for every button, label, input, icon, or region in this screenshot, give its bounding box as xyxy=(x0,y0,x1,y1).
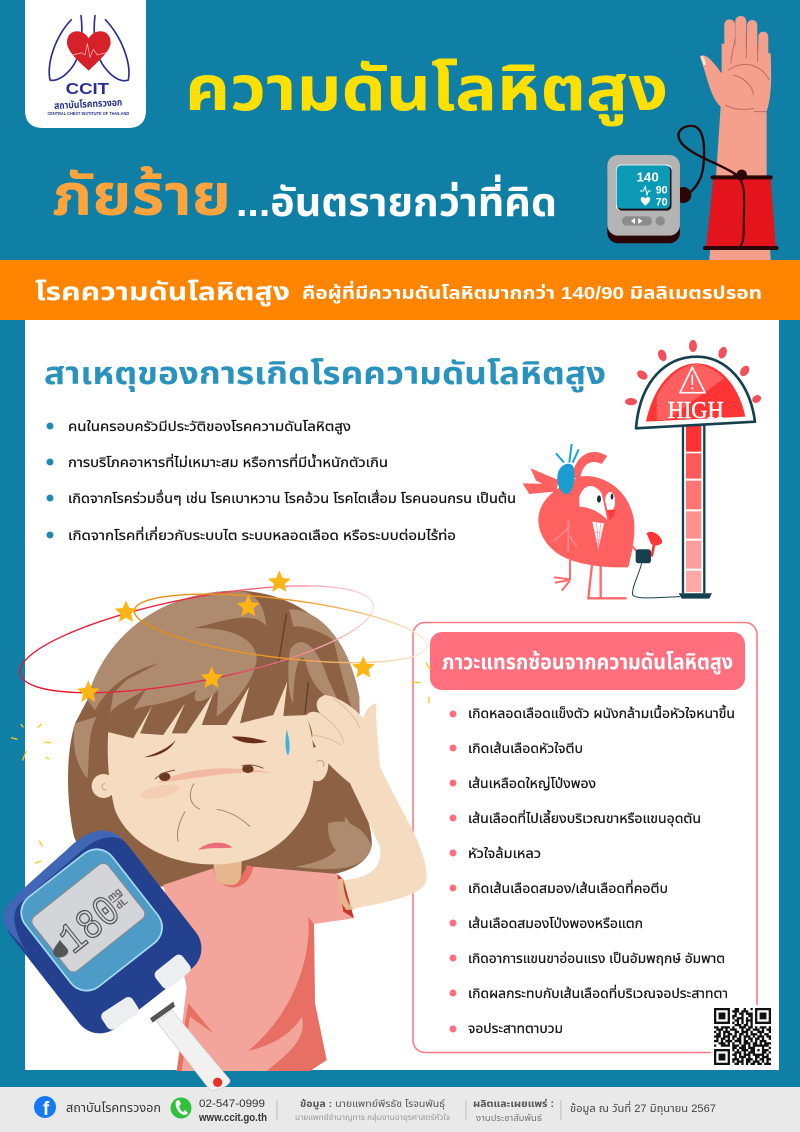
logo card xyxy=(25,0,146,128)
list: causes: เกิดจากโรคที่เกี่ยวกับระบบไต ระบบหลอดเลือด หรือระบบต่อมไร้ท่อ xyxy=(68,526,456,543)
illustration: arm with blood pressure monitor: 90 xyxy=(656,185,668,197)
footer: information credit: ข้อมูล : นายแพทย์พีรธัช โรจนพันธุ์ xyxy=(300,1099,445,1110)
red cuff xyxy=(706,178,776,248)
shirt xyxy=(163,865,354,1071)
orbit: orange xyxy=(131,581,430,675)
list: causes xyxy=(46,419,516,543)
list: complications xyxy=(450,704,735,1036)
footer: contact xyxy=(198,1098,267,1124)
title: ความดันโลหิตสูง xyxy=(185,55,668,127)
illustration: dizzy woman with glucose meter xyxy=(0,564,430,1090)
definition banner xyxy=(0,260,800,320)
ears xyxy=(92,747,328,798)
icon: phone xyxy=(170,1098,192,1118)
list: complications: จอประสาทตาบวม xyxy=(468,1021,563,1036)
hand on head xyxy=(306,695,380,783)
footer: contact: www.ccit.go.th xyxy=(198,1112,267,1124)
footer: information credit xyxy=(295,1099,450,1122)
icon: facebook xyxy=(34,1096,56,1120)
glucose reading: dL xyxy=(114,896,130,912)
gauge xyxy=(625,340,763,599)
illustration: arm with blood pressure monitor: 70 xyxy=(656,197,668,209)
fringe and hair crown xyxy=(74,591,372,869)
list: complications: เกิดหลอดเลือดแข็งตัว ผนังกล้ามเนื้อหัวใจหนาขึ้น xyxy=(468,704,735,721)
sparks xyxy=(11,663,430,863)
facial features xyxy=(102,729,324,850)
footer: information credit: นายแพทย์ชำนาญการ กลุ่มงานอายุรศาสตร์หัวใจ xyxy=(295,1112,450,1122)
footer: institute name: สถาบันโรคทรวงอก xyxy=(66,1101,161,1115)
monitor xyxy=(607,163,680,243)
cheek and nose shading xyxy=(157,768,277,783)
glucose meter xyxy=(0,824,230,1090)
definition banner: โรคความดันโลหิตสูง xyxy=(35,278,290,307)
list: complications: เส้นเหลือดใหญ่โป่งพอง xyxy=(468,776,596,791)
footer bar xyxy=(0,1087,800,1132)
meter buttons xyxy=(99,952,193,1032)
heading: causes: สาเหตุของการเกิดโรคความดันโลหิตสูง xyxy=(44,356,606,392)
list: complications: เส้นเลือดสมองโป่งพองหรือแตก xyxy=(468,916,643,931)
definition banner: คือผู้ที่มีความดันโลหิตมากกว่า 140/90 มิลลิเมตรปรอท xyxy=(302,280,762,304)
icon: facebook: f xyxy=(43,1099,50,1120)
heading: complications: ภาวะแทรกซ้อนจากความดันโลหิตสูง xyxy=(442,651,733,675)
footer: date: ข้อมูล ณ วันที่ 27 มิถุนายน 2567 xyxy=(570,1100,716,1115)
subtitle xyxy=(52,163,557,228)
list: causes: การบริโภคอาหารที่ไม่เหมาะสม หรือการที่มีน้ำหนักตัวเกิน xyxy=(68,453,388,470)
back hair xyxy=(68,591,372,887)
logo card: สถาบันโรคทรวงอก xyxy=(54,97,123,112)
subtitle: ภัยร้าย xyxy=(52,163,231,228)
QR code xyxy=(711,1005,774,1068)
heading: complications xyxy=(430,632,745,690)
test strip xyxy=(150,1002,230,1090)
face xyxy=(108,712,314,864)
neck xyxy=(213,860,242,885)
list: complications: เกิดผลกระทบกับเส้นเลือดที่บริเวณจอประสาทตา xyxy=(468,984,728,1001)
main white panel xyxy=(25,320,779,1070)
list: complications: เกิดอาการแขนขาอ่อนแรง เป็นอัมพฤกษ์ อัมพาต xyxy=(468,951,725,966)
illustration: arm with blood pressure monitor: 140 xyxy=(637,170,659,185)
stars xyxy=(77,570,375,702)
glucose reading: mg xyxy=(105,886,124,904)
list: complications: เกิดเส้นเลือดหัวใจตีบ xyxy=(468,741,583,756)
list: complications: เกิดเส้นเลือดสมอง/เส้นเลือดที่คอตีบ xyxy=(468,879,668,896)
footer: publisher credit xyxy=(473,1097,554,1123)
cable loop xyxy=(679,126,737,197)
illustration: heart with high pressure gauge xyxy=(523,340,763,599)
logo card: CENTRAL CHEST INSTITUTE OF THAILAND xyxy=(47,111,129,116)
arm and hand xyxy=(343,767,427,909)
footer: publisher credit: ผลิตและเผยแพร่ : xyxy=(473,1097,554,1110)
list: causes: คนในครอบครัวมีประวัติของโรคความดันโลหิตสูง xyxy=(68,419,351,434)
illustration: arm with blood pressure monitor xyxy=(607,16,777,260)
footer: publisher credit: งานประชาสัมพันธ์ xyxy=(476,1113,542,1123)
logo card: CCIT xyxy=(66,81,109,98)
footer: contact: 02-547-0999 xyxy=(199,1098,265,1110)
heart character xyxy=(523,444,680,598)
list: causes: เกิดจากโรคร่วมอื่นๆ เช่น โรคเบาหวาน โรคอ้วน โรคไตเสื่อม โรคนอนกรน เป็นต้น xyxy=(68,489,516,506)
list: complications: เส้นเลือดที่ไปเลี้ยงบริเวณขาหรือแขนอุดตัน xyxy=(468,809,701,826)
gauge: HIGH xyxy=(668,398,724,424)
orbit: red xyxy=(12,564,381,715)
panel: complications xyxy=(413,622,757,1052)
glucose reading: 180 xyxy=(51,888,131,966)
subtitle: ...อันตรายกว่าที่คิด xyxy=(236,174,557,225)
list: complications: หัวใจล้มเหลว xyxy=(468,846,541,861)
